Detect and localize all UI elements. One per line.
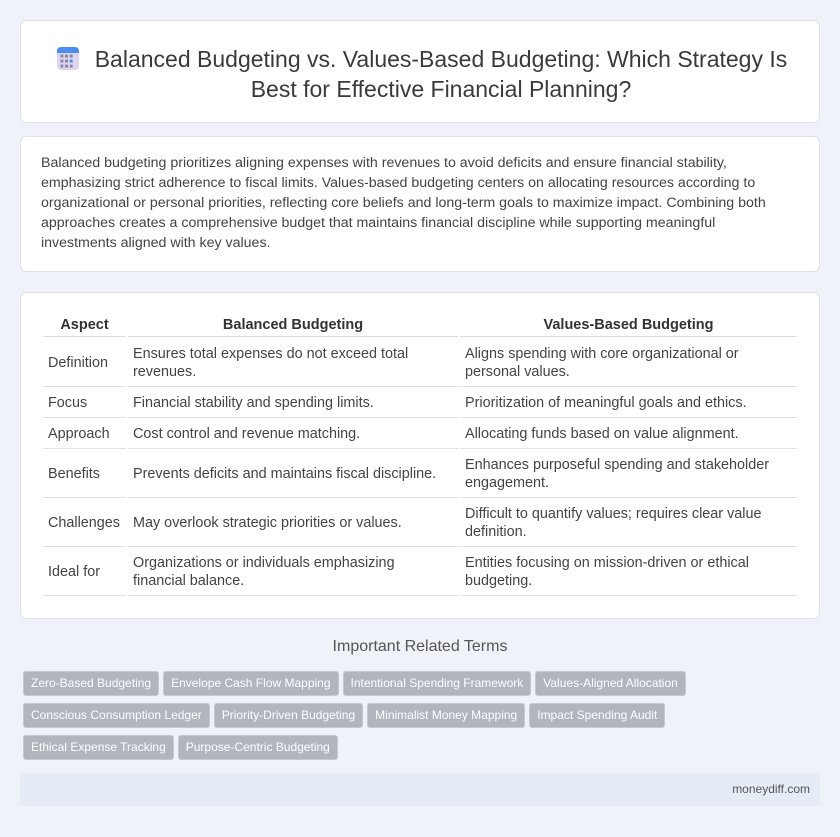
intro text: Balanced budgeting prioritizes aligning expenses with revenues to avoid deficits and ensure financial stability, [41,155,727,171]
comparison table: Balanced Budgeting [223,317,363,333]
comparison table: Prevents deficits and maintains fiscal discipline. [133,466,436,482]
footer: moneydiff.com [732,782,810,796]
comparison table: Definition [48,354,108,370]
comparison table: May overlook strategic priorities or values. [133,515,402,531]
intro text [20,136,820,272]
tags: Purpose-Centric Budgeting [186,740,330,754]
related terms heading: Important Related Terms [333,638,507,655]
comparison table: Cost control and revenue matching. [133,426,360,442]
comparison table: Approach [48,426,110,442]
comparison table: Financial stability and spending limits. [133,395,374,411]
comparison table: Difficult to quantify values; requires clear value definition. [465,506,762,540]
tags: Intentional Spending Framework [350,676,523,690]
comparison table: Prioritization of meaningful goals and ethics. [465,395,747,411]
icon: calendar [57,47,79,70]
title: Balanced Budgeting vs. Values-Based Budgeting: Which Strategy Is Best for Effective Financial Planning? [95,46,787,102]
comparison table [20,292,820,619]
tags: Ethical Expense Tracking [31,740,166,754]
tags [23,671,686,760]
comparison table: Challenges [48,515,120,531]
icon: calendar: ■■■ [60,54,74,60]
comparison table: Values-Based Budgeting [543,317,714,333]
tags: Minimalist Money Mapping [375,708,517,722]
tags: Envelope Cash Flow Mapping [171,676,330,690]
comparison table: Enhances purposeful spending and stakeholder engagement. [465,457,769,491]
comparison table: Ideal for [48,564,100,580]
tags: Zero-Based Budgeting [31,676,151,690]
icon: calendar: ■■■ [60,59,74,65]
comparison table: Allocating funds based on value alignment. [465,426,739,442]
comparison table: Benefits [48,466,100,482]
tags: Impact Spending Audit [537,708,657,722]
icon: calendar: ■■■ [60,64,74,70]
tags: Conscious Consumption Ledger [31,708,202,722]
comparison table: Entities focusing on mission-driven or ethical budgeting. [465,555,749,589]
tags: Priority-Driven Budgeting [222,708,355,722]
comparison table: Focus [48,395,87,411]
footer [20,773,820,806]
comparison table: Aspect [60,317,109,333]
intro text: emphasizing strict adherence to fiscal limits. Values-based budgeting centers on allocating resources according to [41,175,755,191]
tags: Values-Aligned Allocation [543,676,678,690]
header card [20,20,820,123]
intro text: organizational or personal priorities, reflecting core beliefs and long-term goals to maximize impact. Combining both [41,195,766,211]
comparison table: Aligns spending with core organizational or personal values. [465,346,739,380]
comparison table: Ensures total expenses do not exceed total revenues. [133,346,408,380]
intro text: investments aligned with key values. [41,235,270,251]
intro text: approaches creates a comprehensive budget that maintains financial discipline while supporting meaningful [41,215,715,231]
comparison table: Organizations or individuals emphasizing financial balance. [133,555,395,589]
